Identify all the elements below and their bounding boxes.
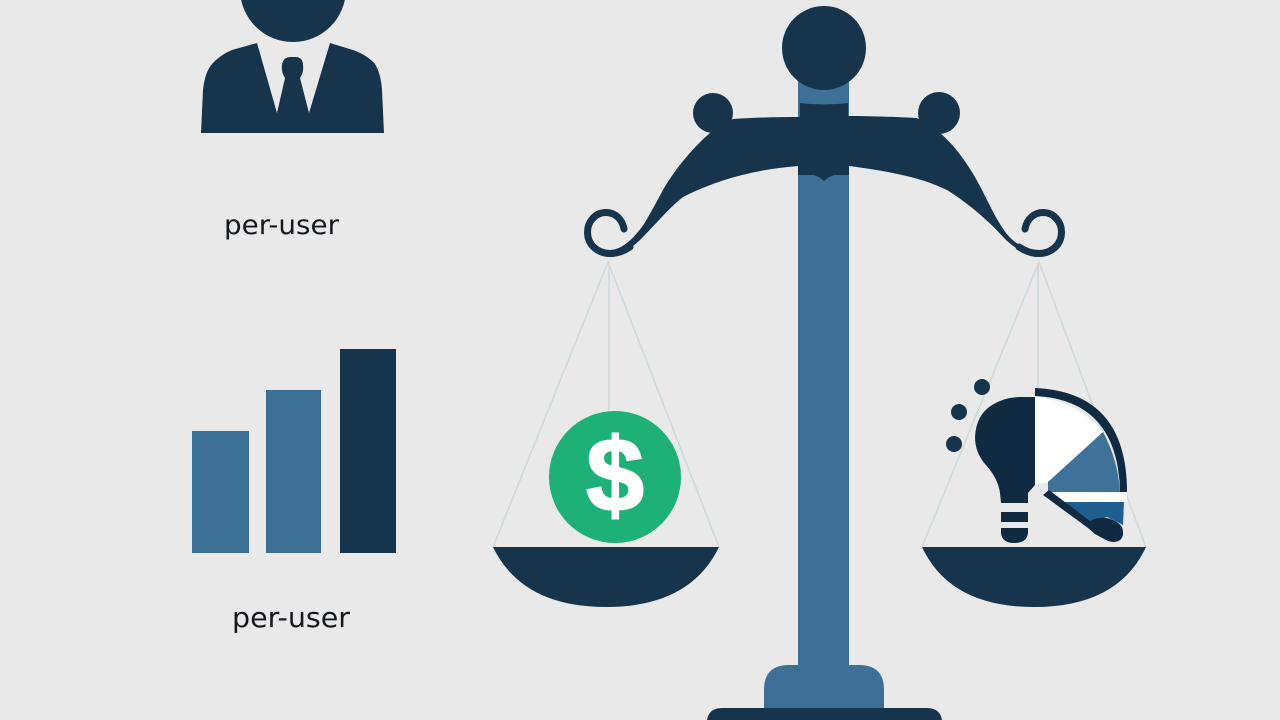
scale beam — [588, 103, 1062, 257]
icon: dollar coin — [549, 411, 681, 543]
idea dots — [946, 379, 990, 452]
gauge white wedge — [1035, 397, 1103, 485]
icon: lightbulb and gauge — [946, 379, 1127, 543]
gauge outer arc — [1035, 388, 1127, 492]
label: per-user top: per-user — [224, 210, 340, 241]
left pan — [493, 547, 719, 607]
right scroll — [1019, 212, 1062, 254]
right pan ropes — [922, 262, 1146, 547]
top finial ball — [782, 6, 866, 90]
left beam knob — [693, 93, 733, 133]
scale stand — [707, 80, 942, 720]
lightbulb half — [975, 397, 1035, 543]
gauge white strip — [1048, 492, 1127, 502]
gauge blue wedge — [1048, 432, 1120, 492]
left scroll — [588, 212, 630, 254]
gauge lower blue wedge — [1056, 502, 1124, 525]
icon: dollar coin: $ — [586, 418, 644, 534]
icon: business person — [201, 0, 384, 133]
left pan ropes — [493, 262, 719, 547]
right beam knob — [918, 92, 960, 134]
right pan — [922, 547, 1146, 607]
bar chart — [192, 349, 396, 553]
gauge needle — [1043, 490, 1123, 542]
label: per-user bottom: per-user — [232, 601, 350, 634]
